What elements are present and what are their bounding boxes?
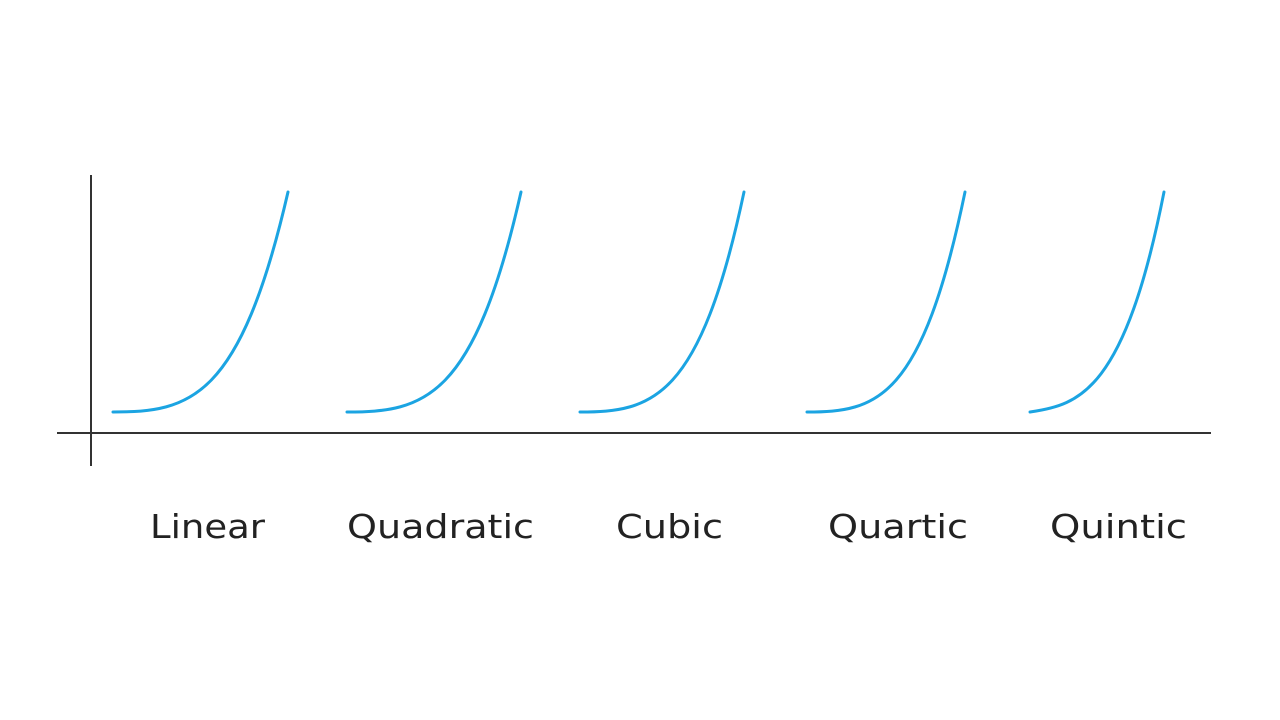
curve: linear <box>113 192 288 412</box>
curve: quadratic <box>347 192 521 412</box>
label: Quadratic: Quadratic <box>347 507 534 546</box>
curve: cubic <box>580 192 744 412</box>
curves <box>113 192 1164 412</box>
label: Quintic: Quintic <box>1050 507 1187 546</box>
label: Quartic: Quartic <box>828 507 968 546</box>
curve: quartic <box>807 192 965 412</box>
label: Cubic: Cubic <box>616 507 723 546</box>
axes <box>57 175 1211 466</box>
curve: quintic <box>1030 192 1164 412</box>
label: Linear: Linear <box>150 507 265 546</box>
labels <box>150 507 1187 546</box>
